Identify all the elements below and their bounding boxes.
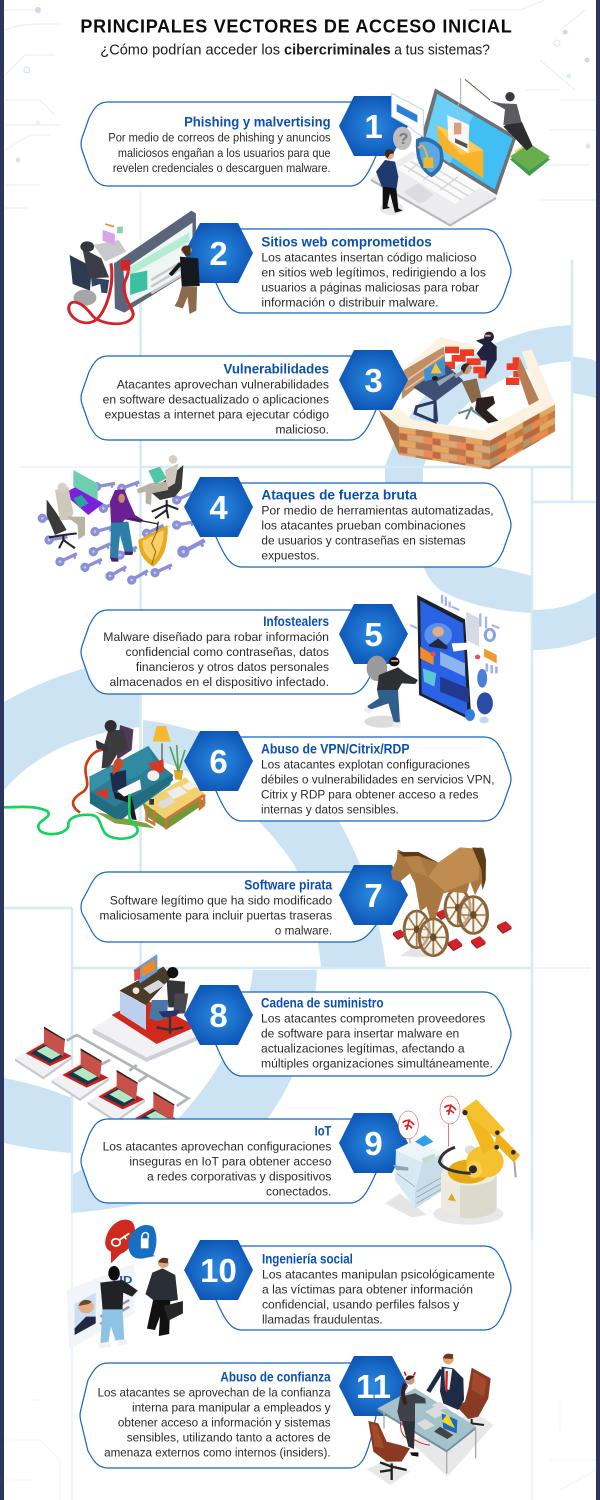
body text 8: Los atacantes comprometen proveedores xyxy=(261,1011,485,1025)
number badge 1: 1 xyxy=(364,108,383,145)
heading 9: IoT xyxy=(315,1124,332,1139)
heading 6: Abuso de VPN/Citrix/RDP xyxy=(261,741,410,756)
number badge 5 xyxy=(339,604,408,664)
panel 2: sitios web comprometidos xyxy=(69,211,511,324)
card outline 5 xyxy=(81,610,376,694)
body text 11: obtener acceso a información y sistemas xyxy=(118,1416,331,1430)
illustration: brute force keys and shield xyxy=(38,455,208,586)
body text 1: revelen credenciales o descarguen malware. xyxy=(113,161,331,175)
body text 11: Los atacantes se aprovechan de la confianza xyxy=(98,1386,331,1400)
body text 2: usuarios a páginas maliciosas para robar xyxy=(261,281,479,295)
heading 10: Ingeniería social xyxy=(262,1251,353,1266)
illustration: trojan horse and chips xyxy=(391,847,512,957)
number badge 10: 10 xyxy=(200,1252,237,1289)
body text 1 xyxy=(108,131,331,175)
body text 6: internas y datos sensibles. xyxy=(261,802,399,816)
panel 7: software pirata xyxy=(81,847,512,957)
number badge 11: 11 xyxy=(356,1368,391,1405)
body text 10: Los atacantes manipulan psicológicamente xyxy=(262,1267,495,1281)
panel 6: abuso de VPN/Citrix/RDP xyxy=(4,720,511,839)
subtitle: ¿Cómo podrían acceder los xyxy=(100,42,280,58)
subtitle: cibercriminales xyxy=(284,42,391,58)
body text 6 xyxy=(261,757,494,816)
panel 10: ingeniería social xyxy=(67,1220,511,1349)
body text 8 xyxy=(261,1011,493,1070)
illustration: social engineering xyxy=(67,1220,183,1349)
body text 4: Por medio de herramientas automatizadas, xyxy=(261,503,494,517)
heading 7: Software pirata xyxy=(244,877,333,892)
heading 1: Phishing y malvertising xyxy=(184,115,331,130)
body text 9: inseguras en IoT para obtener acceso xyxy=(129,1155,332,1169)
number badge 3 xyxy=(339,350,408,410)
card outline 11 xyxy=(80,1363,376,1468)
panel 4: ataques de fuerza bruta xyxy=(38,455,511,586)
body text 2: Los atacantes insertan código malicioso xyxy=(261,251,477,265)
body text 10: confidencial, usando perfiles falsos y xyxy=(262,1297,460,1311)
heading 3: Vulnerabilidades xyxy=(224,361,329,376)
illustration: copier and robot arm xyxy=(385,1096,520,1225)
card outline 8 xyxy=(216,992,511,1076)
subtitle xyxy=(100,42,490,58)
card outline 4 xyxy=(216,483,511,567)
body text 5: Malware diseñado para robar información xyxy=(103,630,329,644)
number badge 7 xyxy=(339,865,408,925)
body text 4: los atacantes prueban combinaciones xyxy=(261,518,466,532)
body text 1: Por medio de correos de phishing y anuncios xyxy=(108,131,331,145)
body text 5: financieros y otros datos personales xyxy=(136,660,329,674)
illustration: office meeting, insider xyxy=(367,1354,493,1485)
number badge 4 xyxy=(184,477,253,537)
illustration: smartphone and thief xyxy=(364,595,499,728)
number badge 8: 8 xyxy=(209,997,228,1034)
subtitle: a tus sistemas? xyxy=(394,42,490,58)
body text 11 xyxy=(98,1386,331,1460)
body text 2 xyxy=(261,251,486,310)
number badge 5: 5 xyxy=(364,616,383,653)
body text 5: confidencial como contraseñas, datos xyxy=(126,645,329,659)
number badge 10 xyxy=(184,1240,253,1300)
body text 6: débiles o vulnerabilidades en servicios VPN, xyxy=(261,772,494,786)
body text 9: a redes corporativas y dispositivos xyxy=(147,1170,331,1184)
body text 3: expuestas a internet para ejecutar código xyxy=(104,407,329,421)
body text 4: expuestos. xyxy=(261,548,320,562)
number badge 2 xyxy=(184,223,253,283)
number badge 4: 4 xyxy=(209,489,228,526)
card outline 10 xyxy=(216,1246,511,1330)
body text 9: Los atacantes aprovechan configuraciones xyxy=(103,1140,331,1154)
body text 4: de usuarios y contraseñas en sistemas xyxy=(261,533,466,547)
body text 3: malicioso. xyxy=(276,422,329,436)
number badge 8 xyxy=(184,985,253,1045)
body text 8: múltiples organizaciones simultáneamente. xyxy=(261,1056,493,1070)
illustration: social engineering: ID xyxy=(119,1273,133,1286)
side frame left xyxy=(0,0,4,1500)
illustration: network of compromised laptops xyxy=(15,954,200,1144)
body text 3 xyxy=(103,377,329,436)
card outline 9 xyxy=(81,1119,376,1203)
panel 5: infostealers xyxy=(81,595,499,728)
panel 8: cadena de suministro xyxy=(15,954,511,1144)
number badge 1 xyxy=(339,96,408,156)
body text 2: en sitios web legítimos, redirigiendo a los xyxy=(261,266,486,280)
body text 3: Atacantes aprovechan vulnerabilidades xyxy=(117,377,329,391)
illustration: laptop phishing: ? xyxy=(399,131,408,148)
body text 7: o malware. xyxy=(275,923,332,937)
title: PRINCIPALES VECTORES DE ACCESO INICIAL xyxy=(80,17,512,37)
body text 3: en software desactualizado o aplicaciones xyxy=(103,392,329,406)
heading 11: Abuso de confianza xyxy=(220,1370,331,1385)
body text 4 xyxy=(261,503,494,562)
body text 7: Software legítimo que ha sido modificado xyxy=(110,893,332,907)
panel 1: phishing y malvertising xyxy=(81,78,550,227)
number badge 9 xyxy=(339,1113,408,1173)
body text 5: almacenados en el dispositivo infectado. xyxy=(110,675,329,689)
number badge 6: 6 xyxy=(209,743,228,780)
body text 10: a las víctimas para obtener información xyxy=(262,1282,473,1296)
body text 9 xyxy=(103,1140,332,1199)
side frame right xyxy=(596,0,600,1500)
body text 10 xyxy=(262,1267,495,1326)
body text 8: de software para insertar malware en xyxy=(261,1026,459,1040)
body text 6: Los atacantes explotan configuraciones xyxy=(261,757,470,771)
number badge 6 xyxy=(184,731,253,791)
card outline 2 xyxy=(216,229,511,313)
heading 4: Ataques de fuerza bruta xyxy=(261,487,418,502)
panel 9: IoT xyxy=(81,1096,520,1225)
number badge 7: 7 xyxy=(364,877,383,914)
body text 6: Citrix y RDP para obtener acceso a redes xyxy=(261,787,478,801)
number badge 3: 3 xyxy=(364,362,383,399)
man pointing at screen xyxy=(170,245,200,314)
body text 11: interna para manipular a empleados y xyxy=(132,1401,331,1415)
heading 5: Infostealers xyxy=(263,614,329,629)
body text 1: maliciosos engañan a los usuarios para que xyxy=(118,146,331,160)
body text 10: llamadas fraudulentas. xyxy=(262,1312,383,1326)
illustration: laptop phishing xyxy=(371,78,550,227)
heading 8: Cadena de suministro xyxy=(261,995,384,1010)
card outline 3 xyxy=(81,356,376,440)
number badge 2: 2 xyxy=(209,235,228,272)
panel 3: vulnerabilidades xyxy=(81,332,555,469)
body text 2: información o distribuir malware. xyxy=(261,296,439,310)
number badge 9: 9 xyxy=(364,1125,383,1162)
number badge 11 xyxy=(339,1356,408,1416)
body text 7 xyxy=(100,893,332,937)
heading 2: Sitios web comprometidos xyxy=(261,235,432,250)
body text 7: maliciosamente para incluir puertas traseras xyxy=(100,908,332,922)
body text 9: conectados. xyxy=(266,1185,331,1199)
card outline 7 xyxy=(81,872,376,942)
body text 11: amenaza externos como internos (insiders). xyxy=(104,1446,331,1460)
illustration: brick wall, desk, hacker xyxy=(378,332,555,469)
body text 5 xyxy=(103,630,329,689)
illustration: sofa, remote worker, hacker, cables xyxy=(4,720,207,839)
illustration: hacker and web monitor xyxy=(69,211,196,324)
card outline 6 xyxy=(216,737,511,821)
card outline 1 xyxy=(81,102,376,186)
body text 8: actualizaciones legítimas, afectando a xyxy=(261,1041,465,1055)
panel 11: abuso de confianza xyxy=(80,1354,493,1485)
body text 11: sensibles, utilizando tanto a actores de xyxy=(127,1431,331,1445)
